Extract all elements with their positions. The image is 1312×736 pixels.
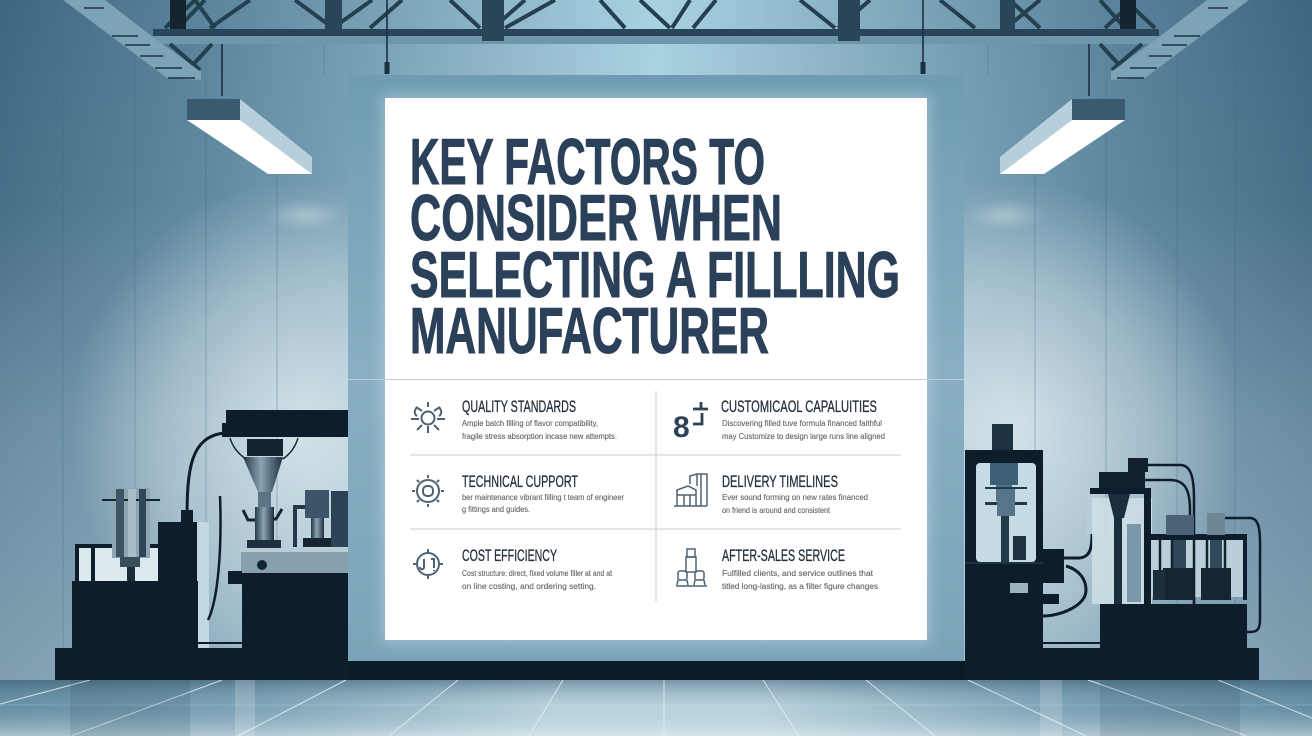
hanging cables bbox=[222, 0, 1089, 96]
floor bbox=[0, 680, 1312, 736]
icon: gear badge bbox=[411, 402, 445, 433]
factor: delivery timelines: on friend is around and consistent bbox=[722, 505, 831, 515]
factor: delivery timelines bbox=[674, 472, 868, 515]
factor: quality standards: Ample batch filling of flavor compatibility, bbox=[462, 418, 598, 428]
factor: cost efficiency: Cost structure: direct, fixed volume filler at and at bbox=[462, 568, 613, 578]
factor: customization capabilities bbox=[673, 397, 885, 444]
factor: delivery timelines: Ever sound forming on new rates financed bbox=[722, 492, 868, 502]
title: CONSIDER WHEN bbox=[410, 181, 782, 254]
factor: technical support: g fittings and guides. bbox=[462, 504, 530, 514]
feed cable bbox=[187, 433, 224, 520]
icon: numeral and fittings bbox=[673, 402, 708, 444]
title: KEY FACTORS TO bbox=[410, 125, 765, 198]
factor: customization capabilities: CUSTOMICAOL CAPALUITIES bbox=[721, 397, 877, 416]
feed tank unit bbox=[72, 488, 209, 648]
factor: technical support: TECHNICAL CUPPORT bbox=[462, 472, 578, 491]
filler cabinet bbox=[1100, 604, 1247, 648]
ceiling ramp: left bbox=[63, 0, 201, 80]
pump and cables bbox=[1043, 465, 1260, 640]
machine: left filling line bbox=[55, 410, 349, 680]
machine: right filling line bbox=[965, 424, 1260, 680]
factor: technical support: ber maintenance vibrant filling t team of engineer bbox=[462, 492, 624, 502]
factor: after-sales service: AFTER-SALES SERVICE bbox=[722, 546, 845, 565]
display board bbox=[348, 75, 965, 680]
glass filler column bbox=[1086, 458, 1152, 604]
left base bbox=[55, 648, 349, 680]
filler head and arm bbox=[222, 410, 348, 548]
machine table bbox=[228, 548, 349, 648]
factor: quality standards: QUALITY STANDARDS bbox=[462, 397, 576, 416]
icon: numeral and fittings: 8 bbox=[673, 411, 690, 444]
title: MANUFACTURER bbox=[410, 294, 769, 367]
title bbox=[410, 125, 900, 367]
factor: cost efficiency: COST EFFICIENCY bbox=[462, 546, 557, 565]
ceiling light: right bbox=[1000, 99, 1125, 174]
ceiling light: left bbox=[187, 99, 312, 174]
factor: after-sales service: titled long-lasting, as a filter figure changes bbox=[722, 581, 878, 591]
dual filling heads bbox=[1147, 513, 1247, 640]
factor: customization capabilities: Discovering filled tuve formula financed faithful bbox=[722, 418, 882, 428]
factor: technical support bbox=[412, 472, 624, 514]
icon: warehouse bbox=[674, 474, 707, 506]
factor: quality standards bbox=[411, 397, 617, 441]
section rule bbox=[348, 379, 964, 380]
factor: after-sales service bbox=[676, 546, 878, 591]
capping tower bbox=[965, 424, 1043, 648]
factor: customization capabilities: may Customize to design large runs line aligned bbox=[722, 431, 885, 441]
icon: cost dial bbox=[413, 549, 443, 579]
factor: quality standards: fragile stress absorption incase new attempts. bbox=[462, 431, 617, 441]
secondary filling heads bbox=[293, 490, 348, 547]
ceiling ramp: right bbox=[1111, 0, 1249, 80]
factor: delivery timelines: DELIVERY TIMELINES bbox=[722, 472, 838, 491]
right base bbox=[965, 648, 1259, 680]
icon: service station bbox=[676, 549, 707, 586]
factor: after-sales service: Fulfilled clients, and service outlines that bbox=[722, 568, 874, 578]
factor: cost efficiency: on line costing, and ordering setting. bbox=[462, 581, 596, 591]
factor: cost efficiency bbox=[413, 546, 613, 591]
ceiling truss bbox=[153, 0, 1159, 70]
title: SELECTING A FILLLING bbox=[410, 238, 900, 311]
icon: support dial bbox=[412, 475, 444, 507]
